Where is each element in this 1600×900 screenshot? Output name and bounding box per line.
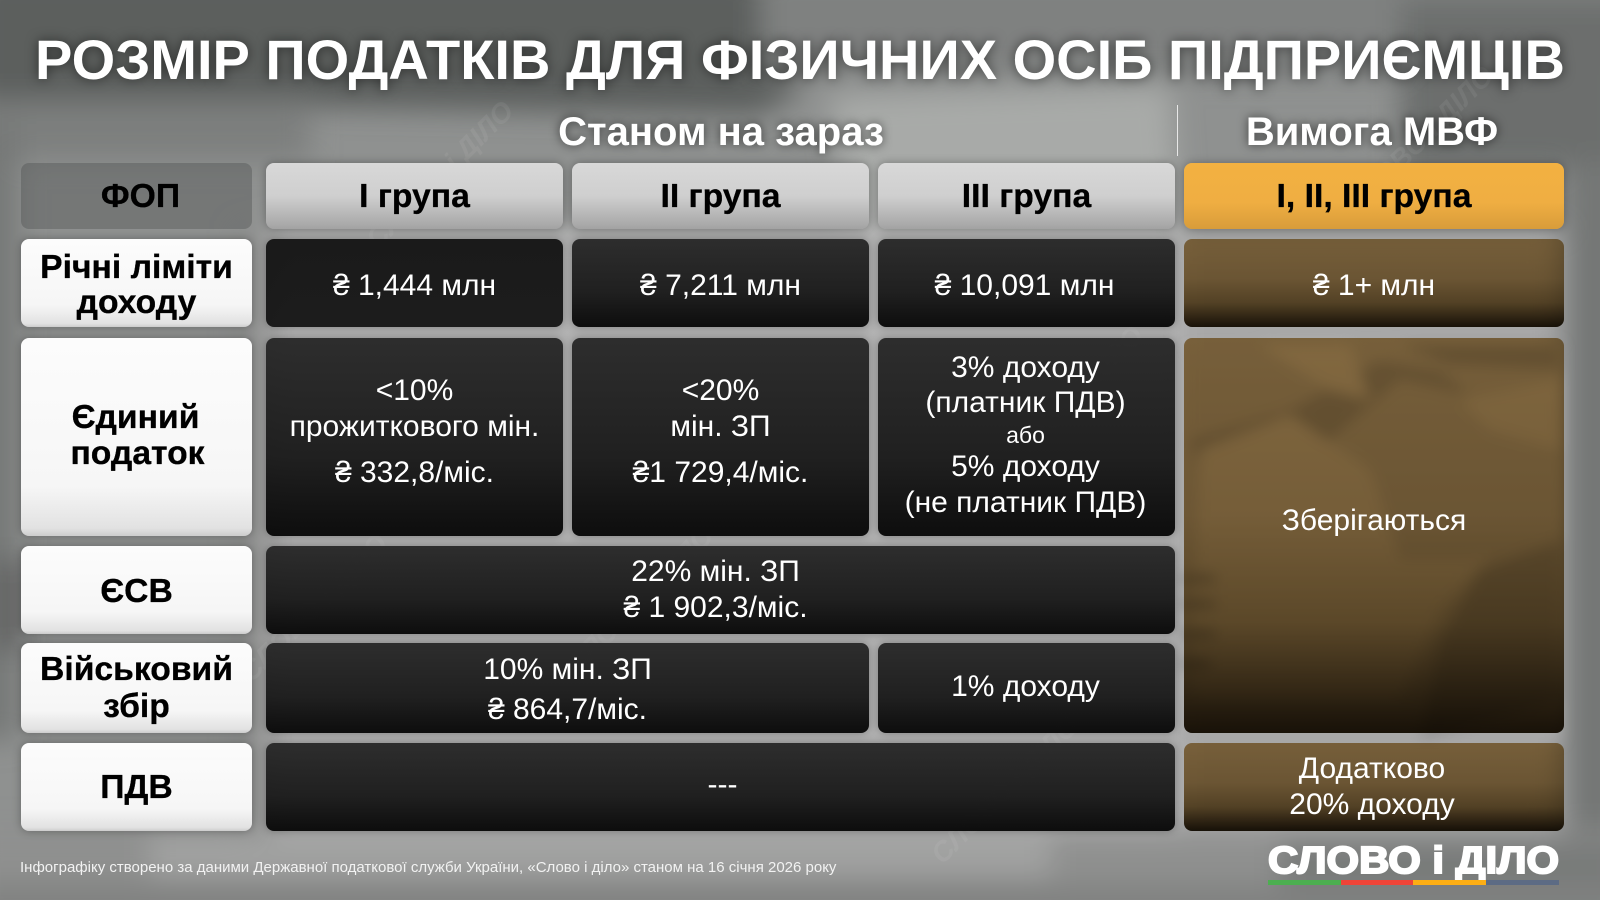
header: III група (878, 163, 1175, 229)
row label: military levy (21, 643, 252, 733)
row label: single tax (21, 338, 252, 536)
single tax: group III: 3% доходу (951, 351, 1100, 384)
watermarks: СЛОВО і ДІЛО (1340, 60, 1500, 220)
limit: IMF requirement (1184, 239, 1564, 327)
header: I група: І група (359, 177, 470, 215)
limit: group II: ₴ 7,211 млн (640, 269, 801, 302)
limit: IMF requirement: ₴ 1+ млн (1313, 269, 1435, 302)
watermarks: СЛОВО і ДІЛО (234, 528, 394, 688)
watermarks: СЛОВО і ДІЛО (360, 95, 520, 255)
header: I група (266, 163, 563, 229)
row label: ЄСВ: ЄСВ (100, 572, 173, 610)
row label: military levy: Військовий (40, 650, 233, 688)
row label: annual income limits: Річні ліміти (40, 248, 233, 286)
single tax: group III: (платник ПДВ) (925, 386, 1126, 419)
row label: ЄСВ (21, 546, 252, 634)
watermarks: СЛОВО і ДІЛО (925, 710, 1085, 870)
row label: VAT: ПДВ (100, 768, 173, 806)
photo shapes seen through the amber panel (1180, 345, 1560, 740)
military levy: group III: 1% доходу (951, 670, 1100, 703)
header: ФОП (21, 163, 252, 229)
ЄСВ value: ₴ 1 902,3/міс. (623, 591, 808, 624)
ЄСВ value (266, 546, 1175, 634)
military levy: groups I and II: ₴ 864,7/міс. (488, 693, 647, 726)
VAT: IMF requirement (1184, 743, 1564, 831)
single tax: group II (572, 338, 869, 536)
row label: military levy: збір (103, 687, 170, 725)
header: I, II, III група (1184, 163, 1564, 229)
row label: annual income limits (21, 239, 252, 327)
military levy: groups I and II (266, 643, 869, 733)
footer source note: Інфографіку створено за даними Державної податкової служби України, «Слово і діло» станом на 16 січня 2026 року (20, 859, 836, 876)
header: III група: ІІІ група (962, 177, 1091, 215)
single tax: group I (266, 338, 563, 536)
single tax: group I: прожиткового мін. (290, 410, 539, 443)
row label: single tax: податок (70, 434, 205, 472)
row label: VAT (21, 743, 252, 831)
limit: group I: ₴ 1,444 млн (333, 269, 496, 302)
single tax: group III: 5% доходу (951, 450, 1100, 483)
header: I, II, III група: І, ІІ, ІІІ група (1277, 177, 1471, 215)
military levy: groups I and II: 10% мін. ЗП (483, 653, 652, 686)
amber panel: retained (1184, 338, 1564, 733)
VAT: IMF requirement: 20% доходу (1289, 788, 1455, 821)
single tax: group II: ₴1 729,4/міс. (633, 456, 808, 489)
military levy: group III (878, 643, 1175, 733)
limit: group III (878, 239, 1175, 327)
header: II група (572, 163, 869, 229)
row label: single tax: Єдиний (72, 398, 199, 436)
single tax: group III (878, 338, 1175, 536)
amber panel: retained: Зберігаються (1282, 504, 1466, 537)
VAT: current: --- (708, 768, 737, 801)
single tax: group II: мін. ЗП (670, 410, 771, 443)
ЄСВ value: 22% мін. ЗП (631, 555, 800, 588)
single tax: group I: ₴ 332,8/міс. (335, 456, 494, 489)
limit: group I (266, 239, 563, 327)
watermarks: СЛОВО і ДІЛО (560, 520, 720, 680)
single tax: group III: (не платник ПДВ) (905, 486, 1146, 519)
single tax: group II: <20% (682, 374, 759, 407)
row label: annual income limits: доходу (77, 283, 196, 321)
header: ФОП: ФОП (101, 177, 180, 215)
VAT: current (266, 743, 1175, 831)
watermarks: СЛОВО і ДІЛО (990, 320, 1150, 480)
title: РОЗМІР ПОДАТКІВ ДЛЯ ФІЗИЧНИХ ОСІБ ПІДПРИЄМЦІВ (35, 28, 1565, 91)
logo: СЛОВО і ДІЛО (1268, 840, 1559, 882)
single tax: group I: <10% (376, 374, 453, 407)
limit: group III: ₴ 10,091 млн (935, 269, 1114, 302)
heading: IMF requirement: Вимога МВФ (1246, 110, 1498, 154)
header: II група: ІІ група (660, 177, 781, 215)
limit: group II (572, 239, 869, 327)
single tax: group III: або (1006, 422, 1045, 448)
heading: current state: Станом на зараз (558, 110, 884, 154)
VAT: IMF requirement: Додатково (1299, 752, 1445, 785)
